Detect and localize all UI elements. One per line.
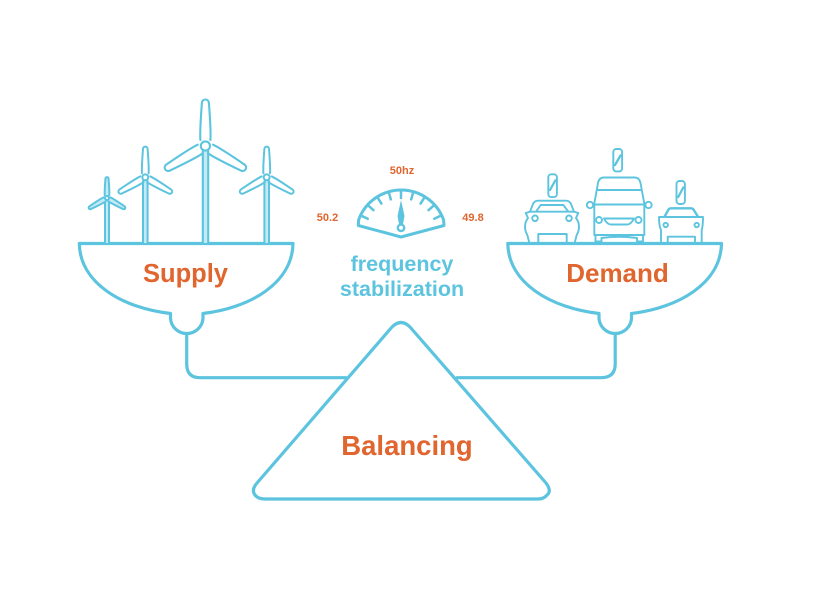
- icon: left charge indicator: [548, 174, 557, 197]
- panel: frequency gauge: [317, 165, 484, 301]
- icon: medium wind turbine right: [238, 147, 295, 243]
- panel: demand side of scale: [457, 149, 722, 378]
- icon: left car: [525, 201, 579, 242]
- icon: small wind turbine: [88, 177, 126, 243]
- heading: frequency stabilization: stabilization: [340, 277, 464, 301]
- icon: gauge dial: [358, 190, 444, 237]
- label: 49.8: 49.8: [462, 212, 484, 224]
- icon: right charge indicator: [676, 181, 685, 204]
- label: 50.2: 50.2: [317, 212, 338, 224]
- icon: medium wind turbine left: [117, 147, 174, 243]
- heading: supply: Supply: [143, 260, 229, 288]
- icon: van: [587, 178, 652, 242]
- icon: gauge needle: [398, 200, 404, 231]
- supply pan: [79, 244, 293, 334]
- heading: demand: Demand: [566, 258, 669, 288]
- icon: large wind turbine: [163, 100, 248, 243]
- fulcrum triangle: [253, 322, 549, 499]
- icon: small car: [659, 208, 703, 242]
- heading: balancing: Balancing: [341, 430, 473, 461]
- panel: balancing fulcrum: [253, 322, 549, 499]
- panel: supply side of scale: [79, 100, 346, 378]
- demand pan: [508, 244, 722, 334]
- heading: frequency stabilization: [340, 252, 464, 301]
- heading: frequency stabilization: frequency: [351, 252, 453, 276]
- demand arm: [457, 335, 615, 378]
- supply arm: [187, 335, 346, 378]
- label: 50hz: 50hz: [390, 165, 415, 177]
- icon: centre charge indicator: [613, 149, 622, 171]
